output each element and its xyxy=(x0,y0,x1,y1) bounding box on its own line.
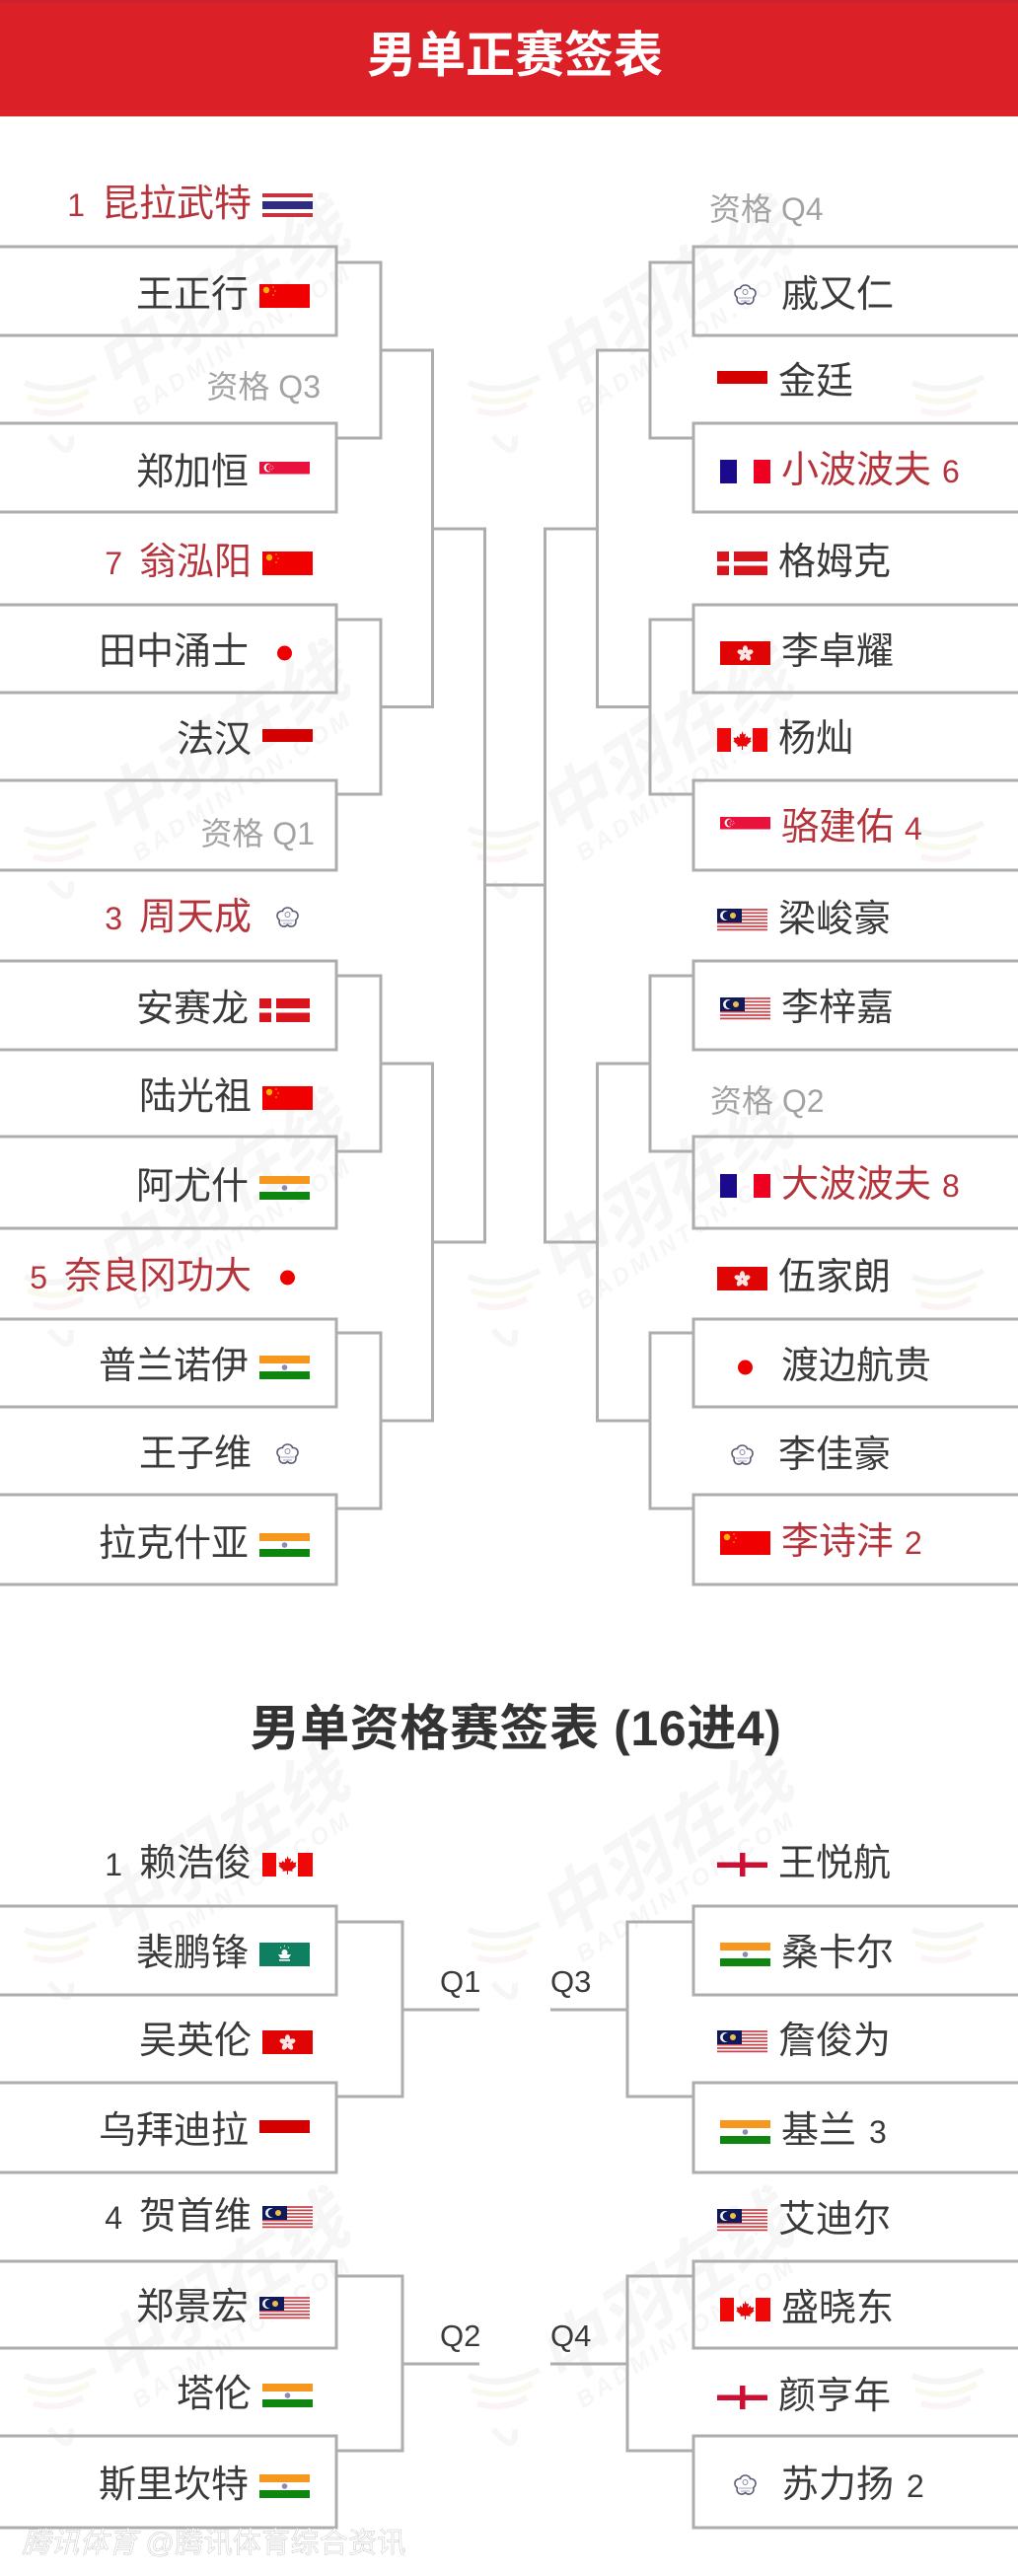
qualifier label: Q1: Q1 xyxy=(440,1964,480,1999)
player: 乌拜迪拉: 乌拜迪拉 xyxy=(99,2110,249,2152)
player: 詹俊为: 詹俊为 xyxy=(778,2021,891,2062)
watermark: 中羽在线 background pattern: 中羽在线 xyxy=(80,631,367,855)
player: 阿尤什: 阿尤什 xyxy=(136,1166,249,1208)
watermark: 中羽在线 background pattern: 中羽在线 xyxy=(524,2178,811,2402)
watermark: 中羽在线 background pattern: 中羽在线 xyxy=(524,1732,811,1956)
player: 杨灿: 杨灿 xyxy=(778,718,853,760)
main draw left players xyxy=(30,184,321,1565)
player: 李诗沣 xyxy=(720,1521,922,1563)
player: 伍家朗 xyxy=(717,1257,891,1298)
player: 艾迪尔: 艾迪尔 xyxy=(778,2199,891,2241)
player: 郑景宏 xyxy=(136,2287,310,2328)
watermark: 中羽在线 background pattern: 中羽在线 xyxy=(524,1079,811,1303)
player: 王正行: 王正行 xyxy=(136,274,249,316)
player: 金廷 xyxy=(717,361,853,403)
player: 昆拉武特: 1 昆拉武特 xyxy=(67,184,252,225)
player: 塔伦 xyxy=(177,2374,313,2415)
player: 桑卡尔: 桑卡尔 xyxy=(781,1933,894,1974)
watermark: 中羽在线 background pattern: BADMINTON.COM xyxy=(127,1805,358,1968)
qualifying left players xyxy=(99,1843,313,2506)
watermark: 中羽在线 background pattern: BADMINTON.COM xyxy=(571,1805,802,1968)
main draw right bracket xyxy=(545,247,1018,1584)
player: 李诗沣: 李诗沣 2 xyxy=(781,1521,922,1563)
label: 资格 Q3: 资格 Q3 xyxy=(206,369,321,405)
watermark: 中羽在线 background pattern: BADMINTON.COM xyxy=(571,2251,802,2414)
player: 戚又仁: 戚又仁 xyxy=(781,274,894,316)
player: 颜亨年 xyxy=(717,2371,974,2418)
label: 资格 Q1: 资格 Q1 xyxy=(200,816,315,851)
player: 陆光祖: 陆光祖 xyxy=(139,1076,252,1118)
watermark: 中羽在线 background pattern: BADMINTON.COM xyxy=(571,704,802,867)
player: 赖浩俊: 1 赖浩俊 xyxy=(105,1843,252,1884)
player: 阿尤什 xyxy=(136,1166,310,1208)
player: 王正行 xyxy=(136,274,310,316)
qualifying left bracket xyxy=(0,1906,479,2528)
watermark: 中羽在线 background pattern: BADMINTON.COM xyxy=(571,258,802,421)
player: 拉克什亚: 拉克什亚 xyxy=(99,1523,249,1565)
player: 法汉: 法汉 xyxy=(177,719,252,761)
player: 梁峻豪: 梁峻豪 xyxy=(778,899,891,940)
player: 郑加恒 xyxy=(136,452,310,493)
player: 翁泓阳: 7 翁泓阳 xyxy=(105,542,252,583)
player: 骆建佑: 骆建佑 4 xyxy=(781,807,922,848)
watermark: 中羽在线 background pattern: BADMINTON.COM xyxy=(127,258,358,421)
player: 梁峻豪 xyxy=(717,899,891,940)
qualifying heading: 男单资格赛签表 (16进4) xyxy=(250,1701,781,1756)
player: 普兰诺伊: 普兰诺伊 xyxy=(99,1346,249,1387)
player: 盛晓东: 盛晓东 xyxy=(781,2288,894,2329)
player: 吴英伦: 吴英伦 xyxy=(139,2021,252,2062)
watermark: 中羽在线 background pattern: 中羽在线 xyxy=(524,185,811,409)
player: 格姆克 xyxy=(717,542,891,583)
player: 裴鹏锋: 裴鹏锋 xyxy=(136,1933,249,1974)
player: 格姆克: 格姆克 xyxy=(778,542,891,583)
source credit watermark: 腾讯体育 @腾讯体育综合资讯 xyxy=(22,2528,406,2559)
watermark: 中羽在线 background pattern: 中羽在线 xyxy=(80,1732,367,1956)
player: 骆建佑 xyxy=(720,807,922,848)
title: 男单正赛签表 xyxy=(367,28,663,83)
player: 王悦航: 王悦航 xyxy=(778,1843,891,1884)
player: 李佳豪: 李佳豪 xyxy=(778,1435,891,1476)
player: 伍家朗: 伍家朗 xyxy=(778,1257,891,1298)
player: 基兰: 基兰 3 xyxy=(781,2110,887,2152)
player: 艾迪尔 xyxy=(717,2194,974,2242)
player: 裴鹏锋 xyxy=(136,1933,310,1974)
watermark: 中羽在线 background pattern: 中羽在线 xyxy=(80,1079,367,1303)
player: 周天成: 3 周天成 xyxy=(105,897,252,938)
player: 王子维: 王子维 xyxy=(139,1434,252,1475)
qualifier label: Q3: Q3 xyxy=(550,1964,591,1999)
player: 大波波夫: 大波波夫 8 xyxy=(781,1164,960,1206)
player: 盛晓东 xyxy=(720,2283,977,2330)
main draw centre connector xyxy=(485,884,545,886)
player: 杨灿 xyxy=(717,718,853,760)
player: 颜亨年: 颜亨年 xyxy=(778,2376,891,2417)
player: 渡边航贵: 渡边航贵 xyxy=(781,1346,931,1387)
player: 安赛龙 xyxy=(136,989,310,1030)
watermark: 中羽在线 background pattern: 中羽在线 xyxy=(80,2178,367,2402)
player: 基兰 xyxy=(720,2105,977,2153)
watermark: 中羽在线 background pattern: BADMINTON.COM xyxy=(127,704,358,867)
player: 王悦航 xyxy=(717,1838,974,1885)
player: 安赛龙: 安赛龙 xyxy=(136,989,249,1030)
watermark: 中羽在线 background pattern: 中羽在线 xyxy=(524,631,811,855)
player: 李梓嘉 xyxy=(720,988,894,1029)
player: 小波波夫: 小波波夫 6 xyxy=(781,450,960,491)
player: 詹俊为 xyxy=(717,2016,974,2063)
qualifier label: Q2: Q2 xyxy=(440,2318,480,2353)
player: 塔伦: 塔伦 xyxy=(177,2374,252,2415)
player: 陆光祖 xyxy=(139,1076,313,1118)
player: 郑加恒: 郑加恒 xyxy=(136,452,249,493)
player: 贺首维: 4 贺首维 xyxy=(105,2196,252,2238)
player: 李梓嘉: 李梓嘉 xyxy=(781,988,894,1029)
main draw left bracket xyxy=(0,247,485,1584)
player: 苏力扬 xyxy=(720,2460,977,2507)
player: 金廷: 金廷 xyxy=(778,361,853,403)
label: 资格 Q4: 资格 Q4 xyxy=(709,191,824,227)
watermark: 中羽在线 background pattern: BADMINTON.COM xyxy=(127,2251,358,2414)
qualifier label: Q4: Q4 xyxy=(550,2318,591,2353)
watermark: 中羽在线 background pattern: 中羽在线 xyxy=(80,185,367,409)
qualifying right players xyxy=(717,1843,924,2506)
watermark: 中羽在线 background pattern: BADMINTON.COM xyxy=(571,1152,802,1315)
player: 奈良冈功大: 5 奈良冈功大 xyxy=(30,1256,252,1297)
player: 田中涌士: 田中涌士 xyxy=(99,631,249,673)
player: 桑卡尔 xyxy=(720,1928,977,1975)
qualifying right bracket xyxy=(550,1906,1018,2528)
player: 吴英伦 xyxy=(139,2021,313,2062)
player: 李卓耀: 李卓耀 xyxy=(781,631,894,673)
player: 斯里坎特: 斯里坎特 xyxy=(99,2465,249,2506)
player: 郑景宏: 郑景宏 xyxy=(136,2287,249,2328)
label: 资格 Q2: 资格 Q2 xyxy=(710,1083,825,1119)
player: 苏力扬: 苏力扬 2 xyxy=(781,2465,924,2506)
watermark: 中羽在线 background pattern: BADMINTON.COM xyxy=(127,1152,358,1315)
header banner xyxy=(0,0,1018,116)
player: 法汉 xyxy=(177,719,313,761)
main draw right players xyxy=(709,191,960,1563)
player: 李卓耀 xyxy=(720,631,894,673)
